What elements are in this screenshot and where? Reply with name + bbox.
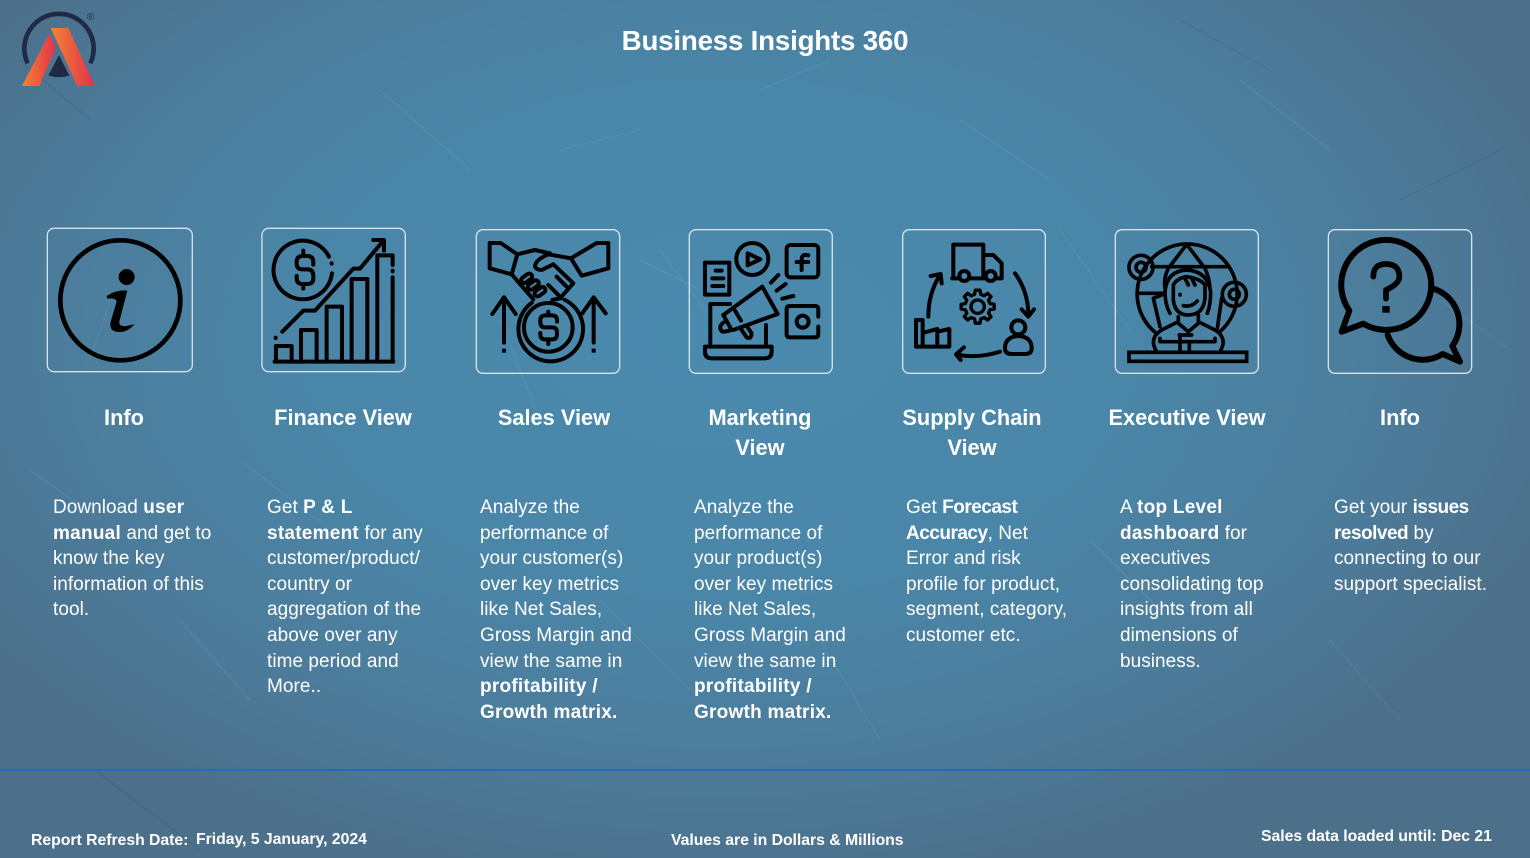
text: sales view: like Net Sales, xyxy=(480,599,602,620)
logo registered mark: ® xyxy=(87,12,94,23)
heading: marketing view: View xyxy=(735,434,785,460)
text: finance view: country or xyxy=(267,574,352,595)
heading: supply chain view: Supply Chain xyxy=(902,404,1042,430)
text: sales view: performance of xyxy=(480,523,608,544)
text: info: tool. xyxy=(53,599,89,620)
text: supply chain view xyxy=(906,497,1067,646)
text: info: Download user xyxy=(53,497,184,518)
text: marketing view xyxy=(694,497,846,723)
text: marketing view: like Net Sales, xyxy=(694,599,816,620)
text: sales view: Analyze the xyxy=(480,497,580,518)
text: sales view: view the same in xyxy=(480,651,622,672)
text: marketing view: over key metrics xyxy=(694,574,833,595)
text: executive view: A top Level xyxy=(1120,497,1223,518)
text: finance view: customer/product/ xyxy=(267,548,420,569)
heading: info: Info xyxy=(104,404,144,430)
text: finance view: above over any xyxy=(267,625,398,646)
heading: marketing view xyxy=(709,404,811,460)
heading: sales view: Sales View xyxy=(498,404,610,430)
text: executive view: dashboard for xyxy=(1120,523,1247,544)
text: finance view: aggregation of the xyxy=(267,599,421,620)
text: info: manual and get to xyxy=(53,523,211,544)
text: finance view: Get P & L xyxy=(267,497,353,518)
text: finance view: More.. xyxy=(267,676,321,697)
text: info: know the key xyxy=(53,548,164,569)
text: sales view xyxy=(480,497,632,723)
text: info support: resolved by xyxy=(1334,523,1434,544)
icon: sales handshake xyxy=(476,230,620,373)
logo xyxy=(22,14,95,86)
text: sales view: Growth matrix. xyxy=(480,702,618,723)
footer: units note: Values are in Dollars & Millions xyxy=(671,832,904,849)
text: info: information of this xyxy=(53,574,204,595)
title: Business Insights 360 xyxy=(622,25,908,56)
icon: question bubbles xyxy=(1328,230,1472,373)
text: supply chain view: Accuracy, Net xyxy=(906,523,1028,544)
icon: supply chain cycle xyxy=(903,230,1045,373)
text: info support: Get your issues xyxy=(1334,497,1469,518)
text: marketing view: Analyze the xyxy=(694,497,794,518)
text: executive view: insights from all xyxy=(1120,599,1253,620)
text: supply chain view: profile for product, xyxy=(906,574,1060,595)
heading: finance view: Finance View xyxy=(274,404,412,430)
text: info support xyxy=(1334,497,1487,595)
footer: refresh date: Report Refresh Date: xyxy=(31,832,188,849)
text: marketing view: Growth matrix. xyxy=(694,702,832,723)
text: executive view: consolidating top xyxy=(1120,574,1263,595)
text: info support: support specialist. xyxy=(1334,574,1487,595)
text: marketing view: Gross Margin and xyxy=(694,625,846,646)
heading: marketing view: Marketing xyxy=(709,404,811,430)
text: marketing view: profitability / xyxy=(694,676,812,697)
heading: executive view: Executive View xyxy=(1108,404,1266,430)
heading: supply chain view xyxy=(902,404,1042,460)
text: executive view: executives xyxy=(1120,548,1210,569)
icon: executive globe xyxy=(1115,230,1258,373)
icon: info xyxy=(47,228,192,372)
footer: refresh date xyxy=(31,831,367,849)
text: sales view: over key metrics xyxy=(480,574,619,595)
text: info xyxy=(53,497,211,620)
text: supply chain view: customer etc. xyxy=(906,625,1021,646)
text: sales view: your customer(s) xyxy=(480,548,623,569)
text: supply chain view: Get Forecast xyxy=(906,497,1017,518)
footer: data loaded: Sales data loaded until: Dec 21 xyxy=(1261,828,1492,845)
icon: marketing megaphone xyxy=(689,230,832,373)
text: finance view xyxy=(267,497,423,697)
footer: refresh date: Friday, 5 January, 2024 xyxy=(196,831,367,848)
heading: info support: Info xyxy=(1380,404,1420,430)
text: marketing view: performance of xyxy=(694,523,822,544)
text: executive view: business. xyxy=(1120,651,1201,672)
text: sales view: profitability / xyxy=(480,676,598,697)
text: marketing view: view the same in xyxy=(694,651,836,672)
text: executive view xyxy=(1120,497,1263,672)
text: finance view: time period and xyxy=(267,651,399,672)
heading: supply chain view: View xyxy=(947,434,997,460)
text: supply chain view: segment, category, xyxy=(906,599,1067,620)
icon: finance chart xyxy=(262,228,405,372)
text: finance view: statement for any xyxy=(267,523,423,544)
text: executive view: dimensions of xyxy=(1120,625,1238,646)
text: marketing view: your product(s) xyxy=(694,548,823,569)
text: supply chain view: Error and risk xyxy=(906,548,1021,569)
text: sales view: Gross Margin and xyxy=(480,625,632,646)
text: info support: connecting to our xyxy=(1334,548,1481,569)
